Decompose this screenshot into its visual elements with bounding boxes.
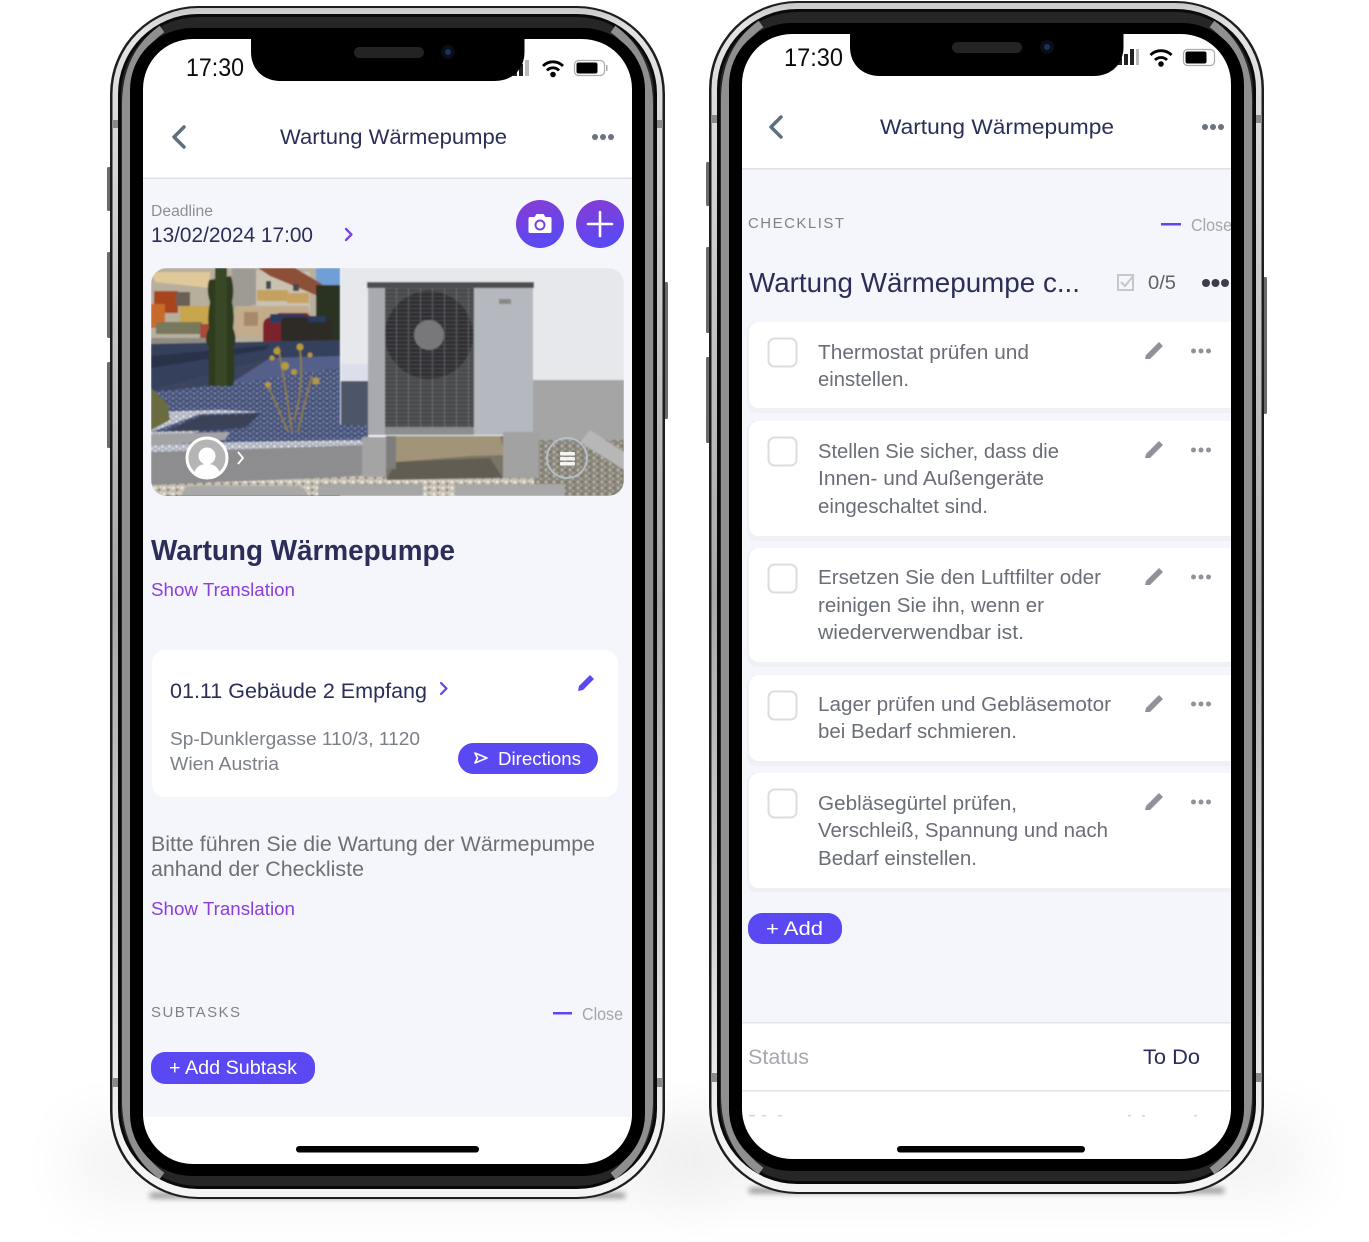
more dots [1202,124,1224,130]
checklist title: Wartung Wärmepumpe c... [749,267,1080,298]
panel: checklist item 5: Verschleiß, Spannung und nach [818,820,1108,842]
add button [748,913,842,944]
phone left [107,6,668,1199]
header title: Wartung Wärmepumpe [880,115,1114,139]
icon: wifi [543,62,563,76]
checklist more dots [1202,279,1229,287]
directions button: Directions [498,748,581,769]
checklist count: 0/5 [1148,273,1176,294]
panel: checklist item 3: wiederverwendbar ist. [817,622,1024,644]
phone right [706,1,1267,1194]
close control [1161,215,1232,235]
icon: edit pencil [578,675,594,691]
notch [244,28,531,81]
panel: checklist item 2: Stellen Sie sicher, dass die [818,441,1059,463]
icon: battery [574,60,608,76]
photo: heat pump [151,268,624,500]
icon: checked box [1118,275,1134,290]
header title: Wartung Wärmepumpe [280,125,507,149]
icon: plus button [576,200,624,248]
signal bars [1118,49,1139,65]
side buttons [107,167,668,448]
description: Bitte führen Sie die Wartung der Wärmepumpe [151,832,595,856]
task heading: Wartung Wärmepumpe [151,535,455,567]
notch [844,23,1130,76]
status row: Status [748,1046,809,1069]
add button: + Add [766,919,823,940]
screen [143,39,632,1164]
close control: Close [1191,215,1232,235]
back arrow [174,127,184,147]
chevron [346,229,352,240]
panel: checklist item 1: einstellen. [818,369,909,391]
panel: checklist item 2 [747,421,1239,541]
status row: To Do [1143,1046,1200,1069]
icon: camera button [516,200,564,248]
panel: location card [152,650,618,797]
panel: checklist item 4: bei Bedarf schmieren. [818,721,1017,743]
signal bars [513,60,529,76]
directions button [458,743,598,774]
description: anhand der Checkliste [151,857,364,881]
description [152,836,594,876]
panel: checklist item 5: Bedarf einstellen. [818,848,977,870]
status bar time: 17:30 [186,54,244,82]
list icon on photo [547,438,587,478]
deadline label: Deadline [151,203,213,220]
screen [742,34,1239,1159]
icon: battery [1184,50,1214,66]
panel: checklist item 3: Ersetzen Sie den Luftfilter oder [818,567,1101,589]
panel: checklist item 5: Gebläsegürtel prüfen, [818,793,1017,815]
chevron [441,683,446,694]
panel: checklist item 4: Lager prüfen und Gebläsemotor [818,694,1111,716]
deadline date: 13/02/2024 17:00 [151,224,313,247]
address: Sp-Dunklergasse 110/3, 1120 [170,728,420,749]
back arrow [771,117,781,137]
add subtask button: + Add Subtask [169,1058,298,1079]
home indicator [296,1146,479,1152]
avatar on photo [187,438,243,478]
panel: checklist item 5 [747,773,1239,892]
address: Wien Austria [170,753,280,774]
panel: checklist item 1: Thermostat prüfen und [818,342,1029,364]
home indicator [897,1146,1085,1152]
icon: wifi [1150,51,1172,65]
panel: checklist item 2: Innen- und Außengeräte [818,468,1044,490]
subtasks label: SUBTASKS [151,1004,240,1021]
status row [742,1022,1231,1092]
phone frame [709,1,1264,1194]
panel: checklist item 4 [747,675,1239,766]
panel: checklist item 2: eingeschaltet sind. [818,496,988,518]
checklist label: CHECKLIST [748,215,844,232]
add subtask button [151,1052,315,1084]
phone shadows [70,1115,1310,1205]
phone frame [110,6,665,1199]
panel: checklist item 3: reinigen Sie ihn, wenn er [818,595,1044,617]
address [170,732,420,770]
location name: 01.11 Gebäude 2 Empfang [170,680,427,703]
close control: Close [582,1004,623,1024]
side buttons [706,162,1267,443]
close control [553,1007,622,1020]
status bar time: 17:30 [784,44,843,72]
show translation link: Show Translation [151,579,295,600]
show translation link: Show Translation [151,898,295,919]
panel: checklist item 1 [747,322,1239,413]
panel: checklist item 3 [747,548,1239,667]
more dots [592,134,614,140]
